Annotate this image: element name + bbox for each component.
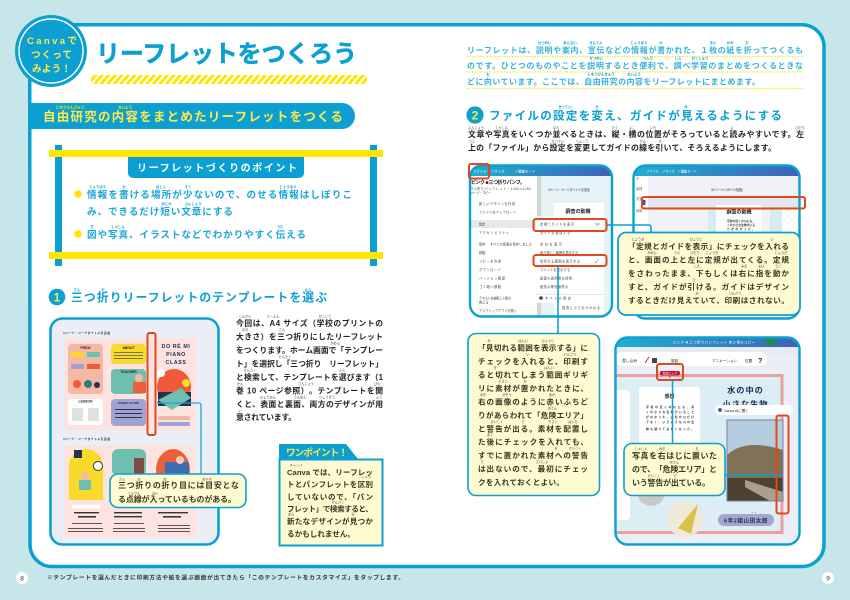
text block: step 2 description: ひ [658, 138, 662, 144]
red marker: guide [642, 197, 805, 208]
callout: one point [279, 444, 382, 546]
callout: rulers and guides: みぎ [741, 264, 748, 268]
callout: bleed area: いんさつ [564, 352, 576, 356]
section heading 2: ファイルの設定を変え、ガイドが見えるようにする [489, 108, 782, 122]
callout: bleed area: はんい [518, 338, 528, 343]
text block: step 2 description: へんこう [576, 138, 588, 144]
panel: file menu screenshot: すべての変更を保存しました [490, 242, 532, 246]
panel: danger area screenshot: 学校の近くの川にも、多 [646, 405, 694, 409]
panel: danger area screenshot: 物も調べてみたくなった。 [646, 427, 694, 431]
panel: file menu screenshot: ファイル [473, 168, 487, 174]
callout: bleed area: みぎ [480, 392, 487, 397]
callout: one point: していないので、「パン [287, 492, 373, 502]
panel: file menu screenshot: 裁ち落とし範囲を表示する [540, 250, 578, 255]
panel: leaflet points [49, 145, 383, 266]
callout: bleed area: た後にチェックを入れても、 [478, 436, 588, 446]
red marker: fold [148, 333, 156, 435]
callout: photo warning: 写真を右はじに置いた [632, 450, 717, 460]
text block: step 1 description: エーよん [267, 314, 280, 318]
text block: step 2 description: 上の「ファイル」から設定を変更してガイドの線を引いて、そろえるようにします。 [468, 142, 776, 152]
panel: file menu screenshot: ファイルをアップロード [479, 210, 516, 214]
callout: bleed area: そざい [498, 378, 508, 384]
callout: one point: るかもしれません。 [287, 530, 355, 538]
callout: bleed area: チェックを入れると、印刷す [478, 356, 588, 366]
banner heading: じゆうけんきゅう [56, 104, 84, 110]
red marker: danger edge [776, 416, 788, 514]
footnote: ※テンプレートを選んだときに印刷方法や紙を選ぶ画面が出てきたら「このテンプレートをカスタマイズ」をタップします。 [47, 574, 404, 582]
callout: bleed area: ると切れてしまう範囲ギリギ [478, 370, 588, 380]
panel: ruler and guide screenshot: 調査の動機 [726, 208, 752, 216]
callout: bleed area: リに素材が置かれたときに、 [478, 383, 588, 393]
panel: danger area screenshot: アニメーション [712, 358, 737, 363]
section heading 1: 1 [54, 290, 61, 304]
callout: bleed area: で [521, 420, 525, 424]
text block: step 1 description: ひら [374, 381, 380, 386]
panel: file menu screenshot: 調査の動機 [565, 208, 591, 215]
panel: danger area screenshot: 6年2組山田太郎 [724, 516, 768, 524]
point 2: しゃしん [111, 224, 125, 229]
panel: file menu screenshot: 定規とガイドを表示 [540, 222, 574, 226]
callout: fold line: め [163, 478, 167, 482]
panel: ruler and guide screenshot: 写真 [636, 208, 643, 213]
template page 1: DO RÉ MI [162, 342, 190, 350]
point 2: つた [277, 224, 284, 229]
callout: bleed area: きけん [547, 406, 558, 410]
intro text: べんり [643, 56, 653, 60]
template page 1: TEACHER [120, 370, 137, 374]
text block: step 1 description: せんたく [279, 354, 291, 359]
badge: Canva でつくってみよう: Canvaで [27, 36, 77, 47]
callout: rulers and guides: ひ [692, 277, 696, 282]
text block: step 2 description: いち [650, 126, 656, 130]
callout: one point: けんさく [332, 500, 344, 504]
section heading 1: えら [305, 287, 311, 292]
callout: rulers and guides: するときだけ見えていて、印刷はされない。 [628, 295, 789, 305]
panel: danger area screenshot: ピンク ■ 三つ折りパンフレット 赤い帯のコピー [673, 340, 756, 344]
panel: file menu screenshot: アクセシビリティ [479, 230, 509, 235]
panel: file menu screenshot: 保存 [479, 242, 486, 246]
callout: bleed area: あと [487, 432, 493, 437]
panel: template screenshot: 4ページ・ページタイトルを追加 [63, 437, 110, 441]
badge: Canva でつくってみよう: つくって [31, 50, 72, 61]
panel: file menu screenshot: バージョン履歴 [479, 276, 506, 280]
callout: rulers and guides [618, 232, 800, 315]
panel: ruler and guide screenshot: くの小さな生物がいる [727, 223, 755, 227]
panel: file menu screenshot [469, 164, 612, 317]
text block: step 2 description: よ [730, 125, 734, 130]
callout: one point: あら [288, 512, 294, 516]
point 1: み、できるだけ短い文章にする [87, 206, 233, 218]
callout: fold line: る点線が入っているものがある。 [118, 494, 236, 504]
callout: bleed area: さいしょ [536, 459, 548, 464]
banner heading: 自由研究の内容をまとめたリーフレットをつくる [43, 109, 343, 124]
panel: file menu screenshot: ガイドを追加する [540, 230, 570, 235]
callout: bleed area: い [526, 352, 530, 356]
section heading 1: お [101, 287, 105, 292]
callout: rulers and guides: ひだり [690, 250, 700, 255]
intro text [467, 40, 803, 88]
point 2: 図や写真、イラストなどでわかりやすく伝える [87, 229, 306, 241]
intro text: リーフレットは、説明や案内、宣伝などの情報が書かれた、１枚の紙を折ってつくるも [467, 45, 803, 55]
callout: rulers and guides: じょうぎ [632, 236, 645, 242]
connectors [672, 380, 674, 444]
callout: photo warning: いう警告が出ている。 [632, 478, 710, 488]
callout: photo warning: みぎ [659, 446, 666, 451]
panel: file menu screenshot: ページ・コピー [471, 190, 491, 195]
intro text: ないよう [627, 72, 641, 76]
point 1: じょうほう [280, 184, 296, 189]
panel: file menu screenshot: 画面の透明度を使用 [540, 276, 572, 280]
callout: rulers and guides: いんさつ [729, 290, 741, 296]
panel: danger area screenshot: Canva AIに聞く [724, 408, 749, 413]
text block: step 1 description: 巻 10 ページ参照）。テンプレートを開 [236, 386, 383, 396]
panel: file menu screenshot: リサイズ [491, 168, 505, 174]
callout: rulers and guides: うご [775, 264, 782, 268]
callout: fold line [110, 474, 246, 508]
callout: one point: み [351, 512, 355, 516]
callout: one point: Canva では、リーフレッ [287, 468, 373, 477]
text block: step 1 description: こんかい [239, 314, 251, 318]
panel: danger area screenshot: 複製 [671, 358, 679, 363]
text block: step 2 description: ぶんしょう [468, 125, 484, 130]
callout: photo warning: しゃしん [635, 446, 648, 451]
callout: bleed area: けいこく [569, 446, 581, 450]
text block: step 1 description: りょうほう [319, 394, 335, 400]
panel: file menu screenshot: すべての設定 [545, 296, 572, 300]
callout: bleed area: すでに置かれた素材への警告 [478, 450, 588, 460]
text block: step 2 description: うえ [469, 138, 475, 144]
panel: ruler and guide screenshot: 文字 [636, 196, 642, 201]
intro text: まい [710, 40, 717, 45]
callout: rulers and guides: じょうぎ [706, 250, 719, 255]
callout: bleed area: あか [549, 392, 556, 397]
panel: file menu screenshot: ダウンロード [479, 267, 501, 272]
callout: fold line: 三つ折りの折り目には目安とな [118, 480, 239, 490]
section heading 2: か [595, 104, 599, 109]
panel: danger area screenshot: 小さな生物 [723, 399, 768, 409]
callout: photo warning: ので、「危険エリア」と [632, 464, 717, 474]
callout: fold line: はい [152, 490, 158, 496]
intro text: どに向いています。ここでは、自由研究の内容をリーフレットにまとめます。 [467, 76, 760, 86]
section heading 1: さん [74, 287, 81, 292]
panel: file menu screenshot: ピンク ■ 三つ折りパンフ。 [471, 179, 525, 186]
red marker: bleed menu item [534, 255, 606, 266]
text block: step 1 description: と検索して、テンプレートを選びます（1 [236, 372, 384, 382]
panel: danger area screenshot: 感想 [664, 393, 675, 400]
page number 8: 8 [20, 576, 24, 582]
callout: rulers and guides: み [695, 290, 699, 296]
callout: one point: ワンポイント！ [286, 448, 348, 459]
red marker: file menu [469, 164, 489, 178]
panel: file menu screenshot: ⇧R [594, 222, 600, 226]
intro text: せんでん [589, 40, 603, 45]
callout: fold line: めやす [202, 476, 212, 482]
section heading 1: 三つ折りリーフレットのテンプレートを選ぶ [71, 290, 327, 304]
intro text: せつめい [538, 40, 552, 45]
callout: bleed area: お [554, 446, 558, 450]
template page 1: PIANO [166, 352, 186, 358]
panel: file menu screenshot: ゴミ箱へ移動 [479, 284, 501, 289]
text block: step 2 description: 文章や写真をいくつか並べるときは、縦・横の位置がそろっていると読みやすいです。左 [468, 129, 804, 139]
text block: step 1 description: さん [279, 327, 286, 332]
text block: step 1 description: おお [242, 327, 249, 332]
callout: bleed area [468, 334, 600, 496]
callout: photo warning: お [695, 446, 699, 451]
panel: file menu screenshot: コメントを表示する [540, 267, 570, 272]
panel: file menu screenshot: コピーを作成 [479, 258, 502, 264]
text block: step 2 description: よこ [629, 125, 635, 130]
text block: step 1 description: い [238, 409, 242, 413]
callout: rulers and guides: 「定規とガイドを表示」にチェックを入れる [628, 241, 789, 251]
text block: step 1 description: よう [376, 394, 382, 400]
page number 9 [822, 572, 834, 584]
callout: photo warning: けいこく [648, 473, 660, 478]
panel: ruler and guide screenshot: 学校の近くの川にも、 [727, 219, 755, 223]
section heading 2 [466, 104, 782, 124]
intro text: む [486, 72, 490, 76]
section heading 2: せってい [558, 104, 572, 109]
callout: fold line: てんせん [128, 490, 141, 496]
text block: step 2 description: ひだり [795, 125, 805, 130]
banner heading [30, 103, 355, 129]
callout: bleed area: き [493, 365, 497, 370]
panel: file menu screenshot: ✓ 編集モード [515, 168, 535, 174]
callout: one point: トとパンフレットを区別 [287, 479, 373, 489]
callout: rulers and guides: い [770, 238, 774, 242]
connector to ruler callout [607, 225, 651, 233]
panel: danger area screenshot: 差し込み [622, 358, 637, 363]
panel: danger area screenshot: 位置 [745, 358, 753, 363]
panel: file menu screenshot: デスクトップアプリを開く [479, 308, 517, 313]
callout: one point: 新たなデザインが見つか [287, 516, 373, 526]
point 1: すく [185, 184, 191, 189]
section heading 2: 2 [472, 108, 479, 122]
intro text: がくしゅう [692, 56, 708, 60]
callout: bleed area: み [487, 338, 491, 343]
text block: step 1 description: うらめん [294, 394, 307, 400]
panel: ruler and guide screenshot: ファイル リサイズ ✓ 編集モード [646, 168, 697, 174]
callout: bleed area: は出ないので、最初にチェッ [478, 464, 588, 474]
callout: bleed area: お [523, 378, 527, 384]
panel: file menu screenshot: 3つ折りパンフレット・1440×1080 [471, 186, 531, 191]
point 1: 情報を書ける場所が少ないので、のせる情報はしぼりこ [87, 189, 352, 201]
callout: rulers and guides: すと、ガイドが引ける。ガイドはデザイン [628, 282, 789, 292]
callout: rulers and guides: した [694, 264, 700, 268]
text block: step 1 description: ひょうめん [260, 394, 277, 400]
callout: rulers and guides: ゆび [758, 264, 765, 268]
point 1: じょうほう [89, 184, 106, 189]
text block: step 1 description [236, 314, 384, 422]
page number 9: 9 [826, 576, 830, 582]
badge: Canva でつくってみよう [15, 15, 87, 87]
callout: bleed area: クを入れておくとよい。 [478, 477, 564, 487]
template page 1: PRICE [80, 346, 91, 350]
point 1: か [122, 184, 126, 189]
text block: step 2 description [468, 125, 805, 152]
point 1 [74, 184, 352, 218]
panel: danger area screenshot: くの小さな生物がいること [646, 410, 694, 414]
callout: bleed area: はんい [544, 365, 554, 370]
panel: file menu screenshot: ✓ [595, 259, 599, 265]
panel: file menu screenshot: 設定 [479, 222, 486, 226]
callout: rulers and guides: をさわったまま、下もしくは右に指を動か [628, 268, 789, 278]
intro text: あんない [563, 40, 577, 45]
text block: step 1 description: かん [237, 381, 244, 386]
text block: step 2 description: せん [640, 138, 647, 144]
template page 1: LESSON [79, 400, 93, 404]
panel: ruler and guide screenshot [633, 165, 805, 319]
intro text: せつめい [589, 56, 603, 60]
callout: rulers and guides: と、画面の上と左に定規が出てくる。定規 [628, 254, 789, 264]
callout: rulers and guides: がめん [647, 250, 658, 255]
panel: danger area screenshot: ? [758, 358, 762, 365]
text block: step 1 description: がめん [330, 340, 341, 346]
panel: ruler and guide screenshot: 素材 [636, 186, 643, 191]
callout: rulers and guides: ひょうじ [690, 236, 702, 242]
points heading: リーフレットづくりのポイント [137, 162, 297, 174]
panel: danger area screenshot: 危険エリア [662, 370, 678, 376]
panel: file menu screenshot: テキストを検索して置き [479, 296, 511, 300]
banner heading: ないよう [118, 104, 132, 110]
panel: template screenshot [50, 318, 246, 545]
panel: template screenshot: 3ページ・ページタイトルを追加 [63, 331, 110, 335]
callout: photo warning: で [673, 474, 677, 478]
text block: step 1 description: くと、表面と裏面、両方のデザインが用 [236, 399, 383, 409]
panel: ruler and guide screenshot: テ [636, 176, 639, 181]
callout: photo warning [624, 444, 725, 496]
panel: file menu screenshot: 新しいデザインを作成 [479, 201, 516, 206]
panel: file menu screenshot: 見切れる範囲を表示する [540, 258, 580, 264]
panel: file menu screenshot: 換える [479, 300, 488, 304]
intro text: かみ [727, 40, 734, 45]
red marker: danger label [657, 364, 683, 380]
page number 8 [16, 572, 28, 584]
text block: step 2 description: たて [612, 125, 618, 130]
text block: step 1 description: えら [339, 368, 345, 372]
intro text: お [745, 40, 749, 45]
template page 1: CLASS [166, 360, 186, 366]
callout: bleed area: はいち [568, 419, 578, 424]
title: リーフレットをつくろう [96, 41, 357, 68]
point 1: ばしょ [156, 184, 166, 189]
callout: fold line: お [137, 476, 141, 482]
callout: bleed area: がぞう [502, 392, 512, 397]
point 2 [74, 224, 306, 241]
intro text: のです。ひとつのものやことを説明するとき便利で、調べ学習のまとめをつくるときな [467, 60, 803, 70]
template page 1: PIANO CLASS [118, 401, 139, 405]
callout: bleed area: と警告が出る。素材を配置し [478, 424, 588, 434]
panel: file menu screenshot: 調査に小さなかかわる [562, 305, 600, 310]
panel: file menu screenshot: 画質の等高線表示 [540, 284, 568, 289]
callout: one point: キャンバ [290, 464, 303, 468]
text block: step 1 description: ト」を選択し「三つ折り リーフレット」 [236, 358, 383, 368]
panel: danger area screenshot: 水の中の [727, 385, 764, 395]
text block: step 2 description: せってい [552, 138, 564, 144]
panel: file menu screenshot: 余白を表示 [540, 242, 562, 246]
text block: step 1 description: 大きさ）を三つ折りにしたリーフレット [236, 332, 383, 342]
panel: danger area screenshot [610, 336, 800, 545]
callout: bleed area: 右の画像のように赤いふちど [478, 396, 588, 406]
intro text: じゆうけんきゅう [587, 72, 615, 76]
text block: step 1 description: をつくります。ホーム画面で「テンプレー [236, 346, 383, 355]
panel: ruler and guide screenshot: 3ページ・ページタイトルを追加 [711, 187, 743, 192]
callout: fold line: さん [119, 476, 126, 482]
callout: bleed area: そざい [548, 419, 558, 424]
point 2: ず [90, 224, 94, 229]
text block: step 1 description: 今回は、A4 サイズ（学校のプリントの [236, 318, 383, 328]
panel: ruler and guide screenshot: とがわかった。 [727, 227, 755, 231]
point 1: みじか [161, 201, 172, 206]
text block: step 1 description: 意されています。 [236, 412, 296, 422]
panel: danger area screenshot: でなく、いろいろな川の生 [646, 420, 694, 424]
text block: step 1 description: さんしょう [298, 381, 314, 386]
template page 1: ABOUT [122, 346, 135, 350]
badge: Canva でつくってみよう: みよう！ [32, 64, 71, 75]
section heading 2: み [684, 104, 688, 109]
intro text: か [659, 40, 663, 45]
callout: bleed area: けいこく [491, 419, 503, 424]
intro text: しら [675, 56, 681, 60]
callout: bleed area: ひょうじ [542, 338, 554, 343]
template page 2 [64, 445, 196, 537]
panel: file menu screenshot: 移動 [479, 250, 485, 255]
text block: step 1 description: けんさく [244, 368, 256, 372]
text block: step 1 description: がっこう [319, 314, 331, 318]
red marker: ruler menu item [534, 219, 606, 231]
title underline hatch [91, 75, 367, 84]
callout: rulers and guides: じょうぎ [775, 250, 788, 255]
callout: rulers and guides: うえ [674, 250, 680, 255]
point 1: ぶんしょう [185, 201, 201, 206]
callout: one point: くべつ [361, 476, 371, 480]
intro text: じょうほう [631, 40, 647, 45]
panel: danger area screenshot: がわかった。山形の川だけ [646, 415, 694, 419]
callout: photo warning: きけん [669, 460, 680, 464]
text block: step 2 description: なら [553, 125, 559, 130]
panel: file menu screenshot: 3ページ・ページタイトルを追加 [548, 187, 590, 192]
callout: bleed area: りがあらわれて「危険エリア」 [478, 410, 588, 420]
connector to fold callout [157, 403, 201, 474]
callout: one point: フレット」で検索すると、 [287, 504, 373, 514]
points heading [128, 157, 304, 178]
template page 1 [64, 338, 196, 430]
connector to bleed callout [557, 266, 559, 334]
callout: bleed area: で [480, 460, 484, 464]
callout: bleed area: 「見切れる範囲を表示する」に [478, 342, 588, 352]
text block: step 2 description: しゃしん [495, 125, 509, 130]
